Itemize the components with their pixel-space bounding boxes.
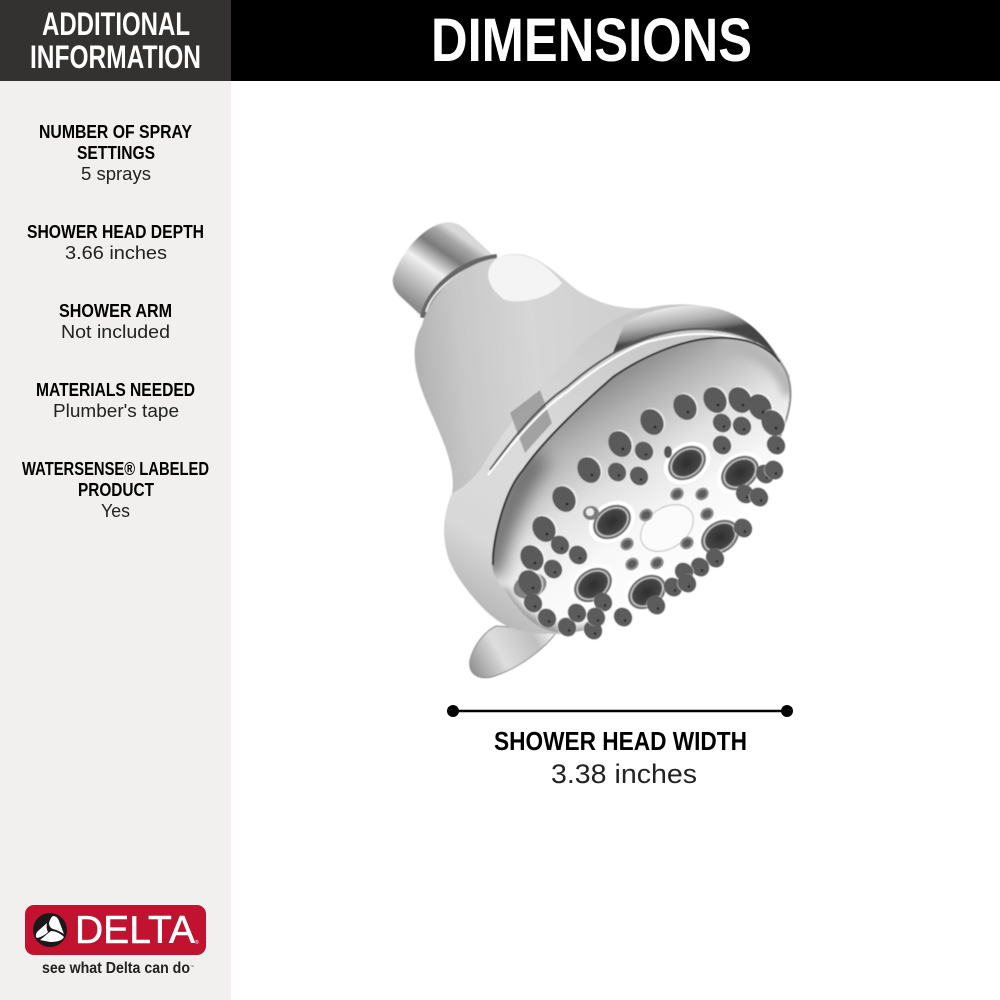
face rim line xyxy=(493,338,780,565)
delta logo: ™ xyxy=(190,964,194,969)
spec: shower arm xyxy=(59,301,172,342)
dimension label xyxy=(494,726,747,789)
outer spray nozzles xyxy=(514,381,791,600)
groove highlight xyxy=(488,334,750,475)
spec: watersense labeled product: Yes xyxy=(101,501,130,521)
sidebar panel xyxy=(0,81,231,1000)
delta logo: ® xyxy=(195,939,199,946)
dimension label: 3.38 inches xyxy=(551,759,697,789)
delta logo: DELTA xyxy=(75,909,195,952)
groove xyxy=(490,329,757,470)
spec: watersense labeled product xyxy=(22,459,209,521)
shoulder highlight xyxy=(488,255,562,301)
delta logo xyxy=(25,905,206,977)
thread ring xyxy=(424,258,497,318)
head body xyxy=(415,254,647,494)
delta logo: see what Delta can do xyxy=(42,960,190,977)
thread highlight xyxy=(426,261,494,312)
header: additional information xyxy=(0,0,231,81)
face plate xyxy=(492,338,790,633)
spec: shower arm: Not included xyxy=(61,322,170,342)
medium spray nozzles xyxy=(520,410,789,643)
collar cylinder xyxy=(393,222,500,322)
header: dimensions: DIMENSIONS xyxy=(431,6,752,74)
spec: shower head depth xyxy=(27,222,204,263)
header: additional information: ADDITIONAL xyxy=(42,6,190,42)
header: dimensions xyxy=(231,0,1000,81)
spec: materials needed xyxy=(36,380,195,421)
header: additional information: INFORMATION xyxy=(30,39,201,75)
spec: number of spray settings: NUMBER OF SPRAY xyxy=(39,122,192,142)
spec: shower head depth: SHOWER HEAD DEPTH xyxy=(27,222,204,242)
skirt patch xyxy=(510,390,552,453)
handle tab xyxy=(470,626,558,678)
spec: shower arm: SHOWER ARM xyxy=(59,301,172,321)
dimension line xyxy=(447,705,793,717)
spec: materials needed: Plumber's tape xyxy=(53,401,179,421)
spec: number of spray settings: SETTINGS xyxy=(77,143,155,163)
spec: watersense labeled product: PRODUCT xyxy=(78,480,154,500)
center plate xyxy=(632,495,702,561)
dimension label: SHOWER HEAD WIDTH xyxy=(494,726,747,756)
face shading xyxy=(490,345,790,634)
shower head illustration xyxy=(393,222,791,678)
spec: watersense labeled product: WATERSENSE® LABELED xyxy=(22,459,209,479)
icon: delta emblem xyxy=(33,913,67,947)
rim right edge xyxy=(777,362,790,443)
small center nozzles xyxy=(618,485,716,573)
upper ring band xyxy=(612,306,778,358)
spec: number of spray settings xyxy=(39,122,192,184)
spec: shower head depth: 3.66 inches xyxy=(65,243,167,263)
spec: materials needed: MATERIALS NEEDED xyxy=(36,380,195,400)
skirt xyxy=(444,304,790,634)
large nozzles xyxy=(510,433,771,622)
spec: number of spray settings: 5 sprays xyxy=(81,164,151,184)
